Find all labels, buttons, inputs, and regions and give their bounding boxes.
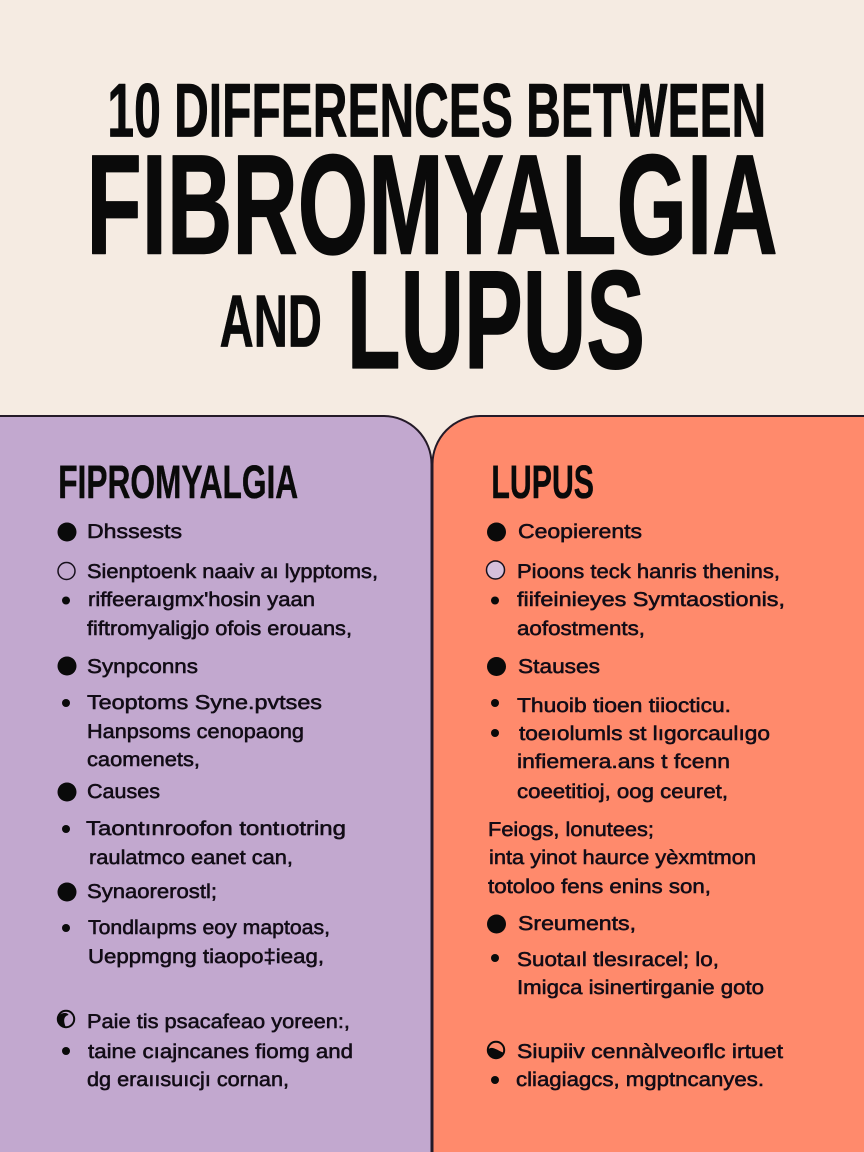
item: Siupiiv list <box>488 1041 784 1091</box>
title <box>86 68 778 398</box>
item: Sienptoenk list <box>58 561 378 640</box>
item: Dhssests: Dhssests <box>87 521 182 543</box>
item: Thuoib list: toeıolumls st lıgorcaulıgo <box>519 723 770 745</box>
text block: Feiogs <box>488 819 756 898</box>
item: Tondlaipms list <box>62 917 330 968</box>
item: Siupiiv list: cliagiagcs, mgptncanyes. <box>516 1069 764 1091</box>
item: Thuoib list: Thuoib tioen tiiocticu. <box>517 695 731 717</box>
item: Siupiiv list: Siupiiv cennàlveoıflc irtuet <box>517 1041 784 1063</box>
item: Sienptoenk list: Sienptoenk naaiv aı lypptoms, <box>87 561 378 583</box>
item: Taontinroofon list: raulatmco eanet can, <box>89 847 293 869</box>
item: Teoptoms list: caomenets, <box>87 749 200 771</box>
item: Thuoib list <box>491 695 770 803</box>
item: Pioons list: Pioons teck hanris thenins, <box>517 561 780 583</box>
item: Sienptoenk list: riffeeraıgmx'hosin yaan <box>88 589 315 611</box>
item: Ceopierents: Ceopierents <box>518 521 642 543</box>
item: Pioons list <box>486 561 785 640</box>
item: Stauses <box>487 656 600 678</box>
item: Taontinroofon list: Taontınroofon tontıotring <box>86 818 346 840</box>
item: Synaorerostl: Synaorerostl; <box>87 881 217 903</box>
item: Paie list: Paie tis psacafeao yoreen:, <box>87 1011 350 1033</box>
item: Paie list: dg eraıısuıcjı cornan, <box>87 1069 289 1091</box>
item: Teoptoms list <box>62 692 322 771</box>
item: Sienptoenk list: fiftromyaligjo ofois erouans, <box>87 618 352 640</box>
item: Dhssests <box>58 521 182 543</box>
item: Synpconns: Synpconns <box>87 656 198 678</box>
item: Sreuments: Sreuments, <box>518 913 636 935</box>
text block: Feiogs: totoloo fens enins son, <box>488 876 711 898</box>
panel: fibromyalgia <box>0 416 432 1152</box>
panel: lupus <box>432 416 864 1152</box>
item: Suotail list: Imigca isinertirganie goto <box>517 977 764 999</box>
item: Causes <box>58 781 160 803</box>
item: Tondlaipms list: Ueppmgng tiaopo‡ieag, <box>88 946 324 968</box>
item: Causes: Causes <box>87 781 160 803</box>
item: Thuoib list: coeetitioj, oog ceuret, <box>517 781 728 803</box>
item: Paie list: taine cıajncanes fiomg and <box>88 1041 353 1063</box>
item: Tondlaipms list: Tondlaıpms eoy maptoas, <box>88 917 330 939</box>
item: Sreuments <box>487 913 636 935</box>
item: Teoptoms list: Hanpsoms cenopaong <box>87 721 304 743</box>
item: Suotail list: Suotaıl tlesıracel; lo, <box>517 949 719 971</box>
item: Ceopierents <box>487 521 642 543</box>
item: Paie list <box>58 1011 353 1091</box>
item: Suotail list <box>491 949 764 999</box>
item: Stauses: Stauses <box>518 656 600 678</box>
item: Pioons list: fiifeinieyes Symtaostionis, <box>517 589 785 611</box>
item: Taontinroofon list <box>62 818 346 869</box>
item: Thuoib list: infiemera.ans t fcenn <box>517 751 730 773</box>
item: Teoptoms list: Teoptoms Syne.pvtses <box>87 692 322 714</box>
text block: Feiogs: inta yinot haurce yèxmtmon <box>489 847 756 869</box>
item: Pioons list: aofostments, <box>517 618 645 640</box>
text block: Feiogs: Feiogs, lonutees; <box>488 819 654 841</box>
